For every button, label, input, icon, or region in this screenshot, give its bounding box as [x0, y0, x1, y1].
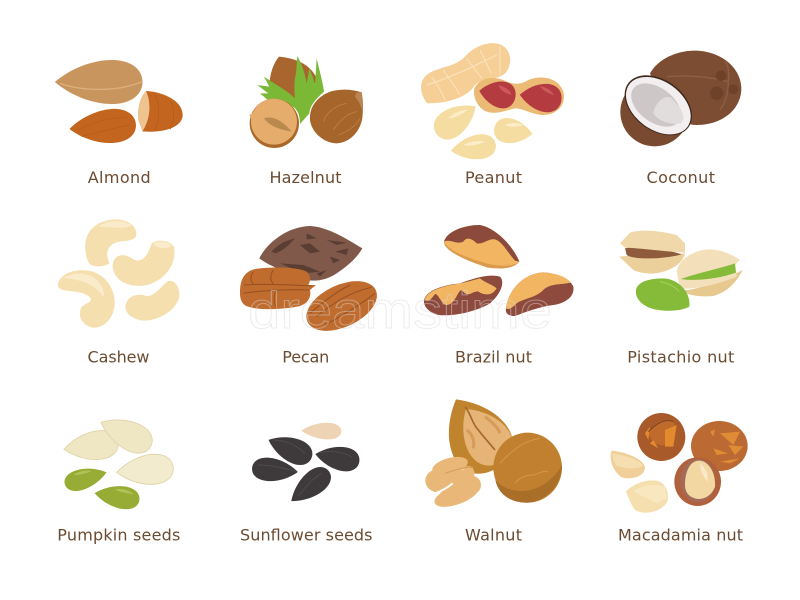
icon: sunflower seeds [251, 422, 361, 510]
label: Pumpkin seeds: Pumpkin seeds [57, 526, 180, 544]
label: Coconut: Coconut [646, 168, 715, 187]
label: Peanut: Peanut [465, 168, 522, 187]
label: Sunflower seeds: Sunflower seeds [240, 526, 372, 544]
label: Pecan: Pecan [282, 348, 329, 366]
panel: peanut [421, 43, 564, 187]
label: Pistachio nut: Pistachio nut [627, 348, 734, 366]
panel: brazil nut [424, 225, 574, 366]
panel: pumpkin seeds [57, 409, 180, 544]
panel: macadamia nut [611, 413, 748, 544]
icon: macadamia nuts [611, 413, 748, 513]
icon: brazil nuts [424, 225, 574, 316]
icon: peanuts [421, 43, 564, 163]
label: Walnut: Walnut [465, 526, 522, 544]
icon: walnuts [425, 384, 562, 512]
label: Hazelnut: Hazelnut [270, 168, 342, 187]
icon: pistachios [619, 231, 743, 311]
icon: pumpkin seeds [62, 409, 175, 511]
panel: cashew [58, 219, 179, 366]
icon: pecans [240, 226, 385, 341]
panel: hazelnut [249, 56, 363, 187]
label: Almond: Almond [88, 168, 151, 187]
label: Macadamia nut: Macadamia nut [618, 526, 743, 544]
panel: walnut [425, 384, 562, 544]
label: Brazil nut: Brazil nut [455, 348, 532, 366]
icon: coconut whole and halved [613, 51, 741, 148]
icon: hazelnuts with green husk [249, 56, 363, 148]
icon: almonds [55, 60, 183, 146]
icon: cashews [58, 219, 179, 328]
label: Cashew: Cashew [88, 348, 150, 366]
panel: pecan [240, 226, 385, 366]
watermark: dreamstime [248, 282, 552, 340]
panel: sunflower seeds [240, 422, 372, 544]
panel: almond [55, 60, 183, 187]
panel: coconut [613, 51, 741, 187]
panel: pistachio nut [619, 231, 743, 366]
